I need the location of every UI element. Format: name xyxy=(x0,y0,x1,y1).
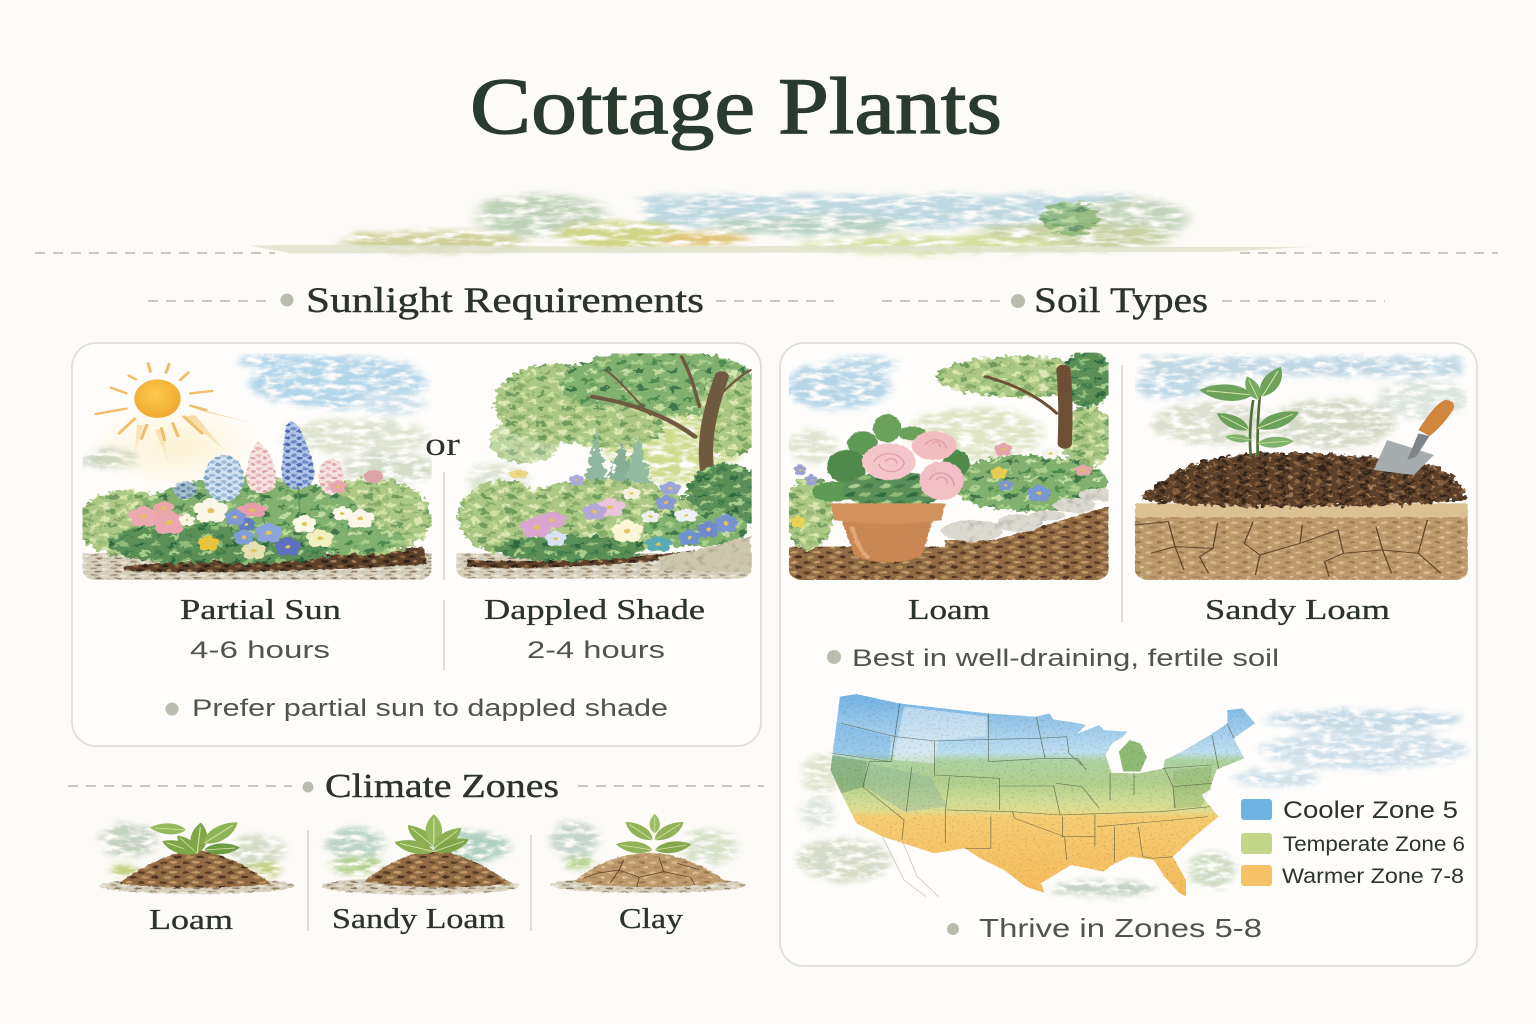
heading: climate zones: Climate Zones xyxy=(325,768,559,805)
label: loam: Loam xyxy=(149,904,234,936)
heading: sunlight requirements xyxy=(148,280,838,320)
foliage xyxy=(77,477,432,563)
ground xyxy=(82,547,432,580)
header landscape illustration xyxy=(249,193,1313,254)
icon: sun xyxy=(96,363,253,468)
delphinium spires xyxy=(174,422,383,540)
map legend xyxy=(1241,797,1465,888)
illustration: sandy loam mound xyxy=(321,814,520,895)
illustration: partial sun garden xyxy=(77,352,441,580)
seedling xyxy=(1198,364,1303,457)
tree trunk xyxy=(985,370,1065,443)
legend swatch: cooler xyxy=(1241,799,1272,820)
ground and foliage xyxy=(456,550,752,579)
illustration: sandy loam with trowel xyxy=(1133,357,1468,580)
legend label: warmer: Warmer Zone 7-8 xyxy=(1282,865,1464,888)
bullet note: soil: Best in well-draining, fertile soil xyxy=(852,645,1279,672)
label: 4-6 hours: 4-6 hours xyxy=(190,637,330,664)
illustration: potted rose xyxy=(784,350,1116,580)
tree canopy xyxy=(490,350,762,463)
label: sandy loam: Sandy Loam xyxy=(1205,594,1391,626)
divider: sandy loam / clay xyxy=(530,835,532,931)
legend swatch: warmer xyxy=(1241,865,1272,886)
legend label: cooler: Cooler Zone 5 xyxy=(1283,797,1458,824)
cracked subsoil xyxy=(1135,503,1468,580)
illustration: loam mound xyxy=(99,817,295,894)
label: 2-4 hours: 2-4 hours xyxy=(527,637,665,664)
trunk xyxy=(592,357,751,480)
heading: soil types xyxy=(882,280,1385,320)
divider: loam / sandy loam xyxy=(1121,365,1123,622)
heading: climate zones xyxy=(68,768,764,805)
illustration: clay mound xyxy=(550,814,745,893)
divider between sun and shade images xyxy=(443,472,445,580)
title: Cottage Plants xyxy=(470,63,1002,151)
divider: loam / sandy loam xyxy=(307,830,309,931)
conifers xyxy=(583,430,653,487)
state borders xyxy=(833,703,1234,862)
bullet note: sunlight: Prefer partial sun to dappled shade xyxy=(192,695,668,722)
label: partial sun: Partial Sun xyxy=(180,594,342,626)
terracotta pot xyxy=(830,503,945,562)
ground and stones xyxy=(789,507,1109,580)
label: sandy loam: Sandy Loam xyxy=(332,903,506,935)
icon: trowel xyxy=(1374,400,1454,475)
legend swatch: temperate xyxy=(1241,833,1272,854)
panel: sunlight xyxy=(72,343,766,746)
plant leaves xyxy=(812,414,970,508)
roses xyxy=(862,431,964,500)
chart: US climate zone map xyxy=(796,694,1468,897)
legend label: temperate: Temperate Zone 6 xyxy=(1283,833,1465,856)
illustration: dappled shade garden xyxy=(456,350,766,579)
dark topsoil xyxy=(1139,452,1465,507)
heading: soil types: Soil Types xyxy=(1034,280,1208,320)
label: dappled shade: Dappled Shade xyxy=(484,594,705,626)
bullet note: zones: Thrive in Zones 5-8 xyxy=(979,913,1262,943)
flowers xyxy=(128,480,375,559)
divider between sun and shade labels xyxy=(443,600,445,670)
top dashed divider right xyxy=(1240,252,1498,254)
heading: sunlight requirements: Sunlight Requirements xyxy=(306,280,704,320)
top dashed divider left xyxy=(35,252,275,254)
word: or: or xyxy=(425,427,460,463)
panel: soil types and zones xyxy=(780,343,1477,966)
label: loam: Loam xyxy=(908,594,991,626)
flowers xyxy=(509,469,738,551)
small flowers xyxy=(790,443,1093,528)
label: clay: Clay xyxy=(619,903,684,935)
